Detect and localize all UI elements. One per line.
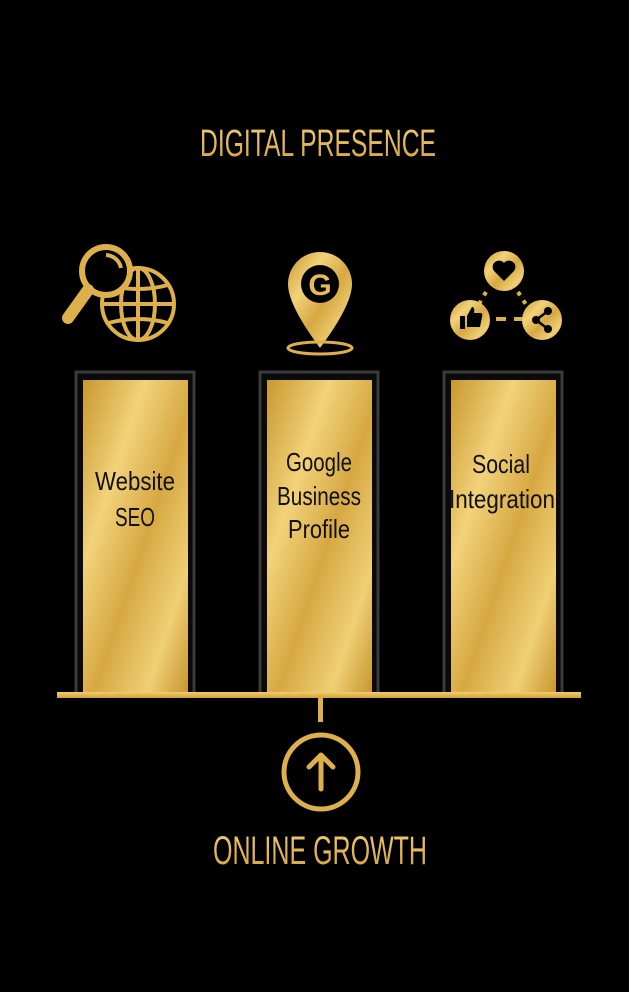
icon: social	[450, 251, 562, 340]
connector stem	[318, 698, 323, 722]
icon: search globe	[68, 247, 174, 340]
pillar: Social Integration	[444, 372, 562, 694]
pillar: Google Business Profile: Profile	[288, 514, 350, 544]
pillar: Social Integration: Social	[472, 449, 530, 479]
pillar: Google Business Profile: Google	[286, 447, 352, 477]
pillar: Website SEO: Website	[95, 466, 175, 496]
pillar: Social Integration: Integration	[449, 484, 555, 514]
base bar	[57, 692, 581, 698]
title: DIGITAL PRESENCE	[200, 123, 436, 165]
pillar: Google Business Profile	[260, 372, 378, 694]
icon: google pin: G	[308, 269, 332, 302]
pillar: Google Business Profile: Business	[277, 481, 361, 511]
icon: up arrow circle	[284, 735, 358, 809]
pillar: Website SEO	[76, 372, 194, 694]
icon: google pin	[288, 252, 352, 354]
footer heading: ONLINE GROWTH	[213, 829, 427, 873]
pillar: Website SEO: SEO	[115, 502, 155, 532]
